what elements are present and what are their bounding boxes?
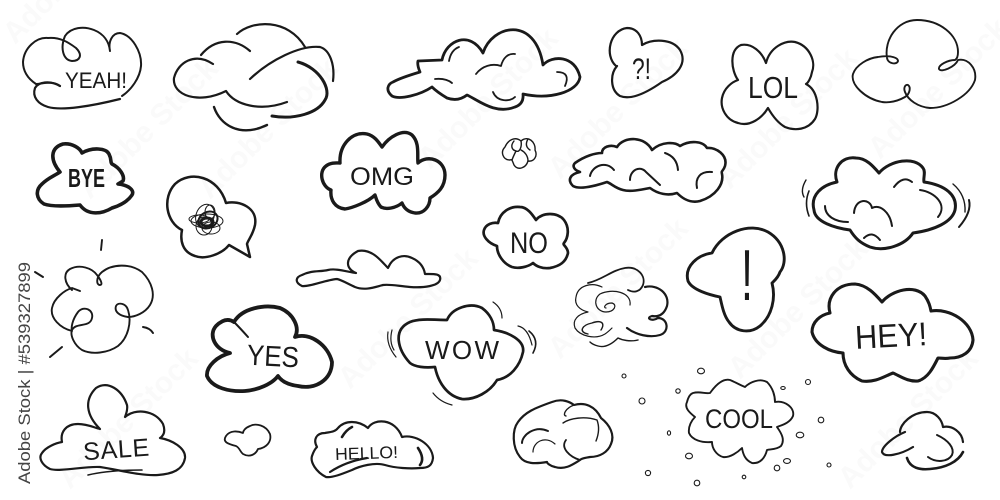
icon: scribble	[189, 202, 223, 235]
cloud: tiny puff	[503, 139, 536, 168]
cloud: LOL	[722, 42, 818, 129]
cloud: NO: NO	[510, 227, 548, 260]
cloud: BYE	[37, 144, 133, 213]
background watermarks: Adobe Stock	[412, 22, 565, 175]
cloud: wind lines	[802, 158, 970, 249]
cloud: WOW	[388, 302, 536, 405]
cloud: OMG: OMG	[350, 163, 414, 191]
cloud: exclamation: !	[741, 235, 753, 316]
cloud: YEAH: YEAH!	[65, 68, 127, 93]
cloud: HELLO: HELLO!	[335, 443, 398, 464]
cloud: YEAH	[23, 28, 141, 108]
background watermarks: Adobe Stock	[712, 42, 865, 195]
cloud: three dimensional	[514, 400, 612, 468]
speech bubble: scribble	[167, 177, 255, 257]
cloud: COOL	[686, 380, 793, 463]
cloud: OMG	[322, 133, 445, 213]
cloud: HEY: HEY!	[854, 315, 928, 356]
cloud: WOW: WOW	[425, 335, 499, 365]
cloud: COOL: COOL	[705, 404, 773, 434]
background watermarks: Adobe Stock	[332, 242, 485, 395]
cloud: looped burst	[35, 240, 153, 357]
cloud: NO	[484, 207, 568, 268]
background watermarks: Adobe Stock	[722, 232, 875, 385]
cloud: large outline	[174, 24, 333, 130]
cloud: YES	[207, 307, 332, 391]
background watermarks: Adobe Stock	[72, 52, 225, 205]
cloud: wide cloud	[388, 30, 580, 109]
cloud: small outline	[225, 425, 270, 456]
background watermarks: Adobe Stock	[192, 52, 345, 205]
cloud: HEY	[812, 284, 973, 381]
background watermarks: Adobe Stock	[52, 342, 205, 495]
cloud: flat long	[297, 251, 440, 289]
side credit text: Adobe Stock | #539327899	[15, 262, 34, 484]
cloud: long puffy	[570, 139, 725, 202]
cloud: LOL: LOL	[748, 70, 798, 105]
background watermarks: Adobe Stock	[542, 212, 695, 365]
cloud: question and exclamation: ?!	[632, 53, 651, 86]
cloud: exclamation	[687, 228, 784, 331]
cloud: SALE	[40, 385, 185, 475]
cloud: HELLO	[312, 421, 433, 477]
cloud: open bottom right	[882, 412, 963, 469]
background watermarks: Adobe Stock	[542, 32, 695, 185]
cloud: BYE: BYE	[68, 163, 105, 193]
cloud: YES: YES	[246, 340, 300, 374]
cloud: swirl	[574, 268, 667, 347]
background watermarks: Adobe Stock	[832, 342, 985, 495]
cloud: SALE: SALE	[82, 434, 150, 466]
cloud: question and exclamation	[610, 28, 683, 97]
decorative bubbles around COOL	[622, 368, 831, 486]
cloud: loopy top right	[853, 20, 975, 108]
